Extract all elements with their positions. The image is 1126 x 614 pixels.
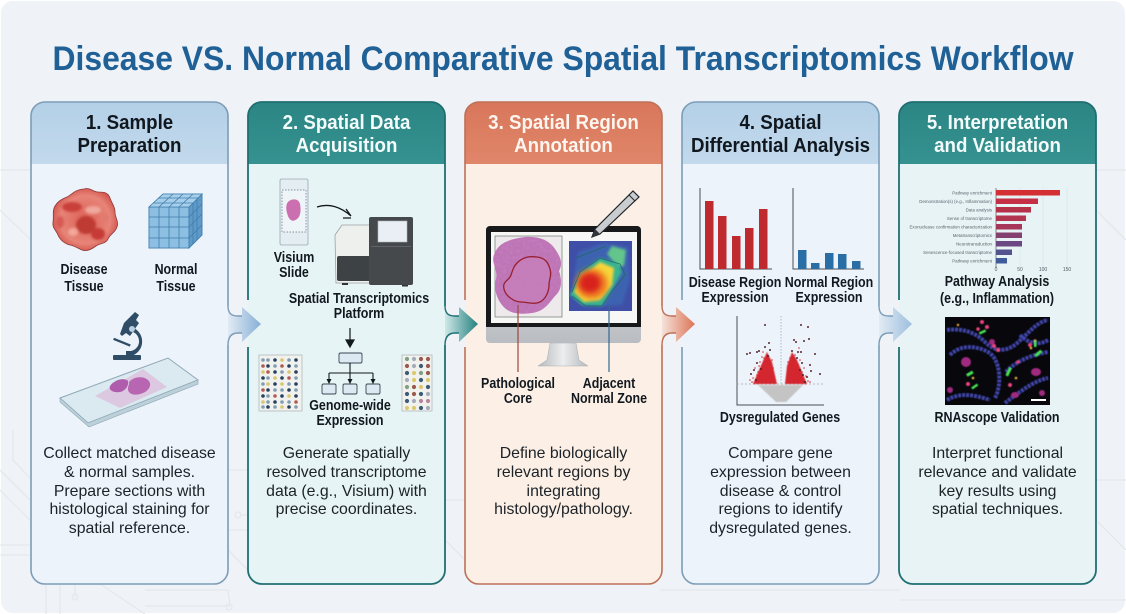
icon: annotation pencil: [592, 191, 639, 237]
panel 5 heading: and Validation: [934, 134, 1061, 157]
icon: tissue slide: [60, 358, 198, 427]
label: visium slide: Slide: [279, 264, 309, 280]
diagram: expression hierarchy: [322, 353, 380, 394]
chart: pathway analysis bars: 0: [995, 267, 998, 273]
panel 3 heading: 3. Spatial Region: [488, 111, 639, 134]
chart: pathway analysis bars: Pathway enrichment: [952, 258, 993, 264]
chart: pathway analysis bars: Pathway enrichment: [952, 190, 993, 196]
label: normal region expression: Expression: [795, 289, 863, 305]
panel 4 heading: Differential Analysis: [691, 134, 870, 157]
label: genome-wide expression: Expression: [316, 412, 384, 428]
panel 4 heading: 4. Spatial: [739, 111, 822, 134]
text: panel 1 description: spatial reference.: [69, 520, 190, 537]
icon: visium slide: [280, 179, 308, 245]
label: visium slide: Visium: [274, 249, 314, 265]
label: disease region expression: Disease Region: [689, 274, 781, 290]
label: disease region expression: Expression: [701, 289, 769, 305]
label: spatial transcriptomics platform: Platform: [334, 305, 384, 321]
text: panel 1 description: histological staining for: [49, 501, 210, 518]
chart: pathway analysis bars: Demonstration(s) (e.g., Inflammation): [919, 199, 993, 204]
label: dysregulated genes: Dysregulated Genes: [720, 409, 840, 425]
label: spatial transcriptomics platform: Spatial Transcriptomics: [289, 290, 429, 306]
text: panel 2 description: precise coordinates.: [276, 501, 417, 518]
chart: volcano plot: [737, 316, 824, 405]
text: panel 2 description: data (e.g., Visium) with: [266, 483, 427, 500]
text: panel 5 description: relevance and validate: [918, 464, 1077, 481]
label: pathway analysis: Pathway Analysis: [945, 273, 1050, 289]
label: normal region expression: Normal Region: [785, 274, 873, 290]
image: RNAscope micrograph: [945, 317, 1050, 405]
panel 1 heading: Preparation: [78, 134, 181, 157]
label: disease tissue: Tissue: [64, 278, 104, 294]
panel 2 heading: 2. Spatial Data: [283, 111, 411, 134]
text: panel 5 description: key results using: [939, 483, 1056, 500]
chart: pathway analysis bars: Neurotransduction: [956, 242, 993, 246]
icon: monitor with histology and heat map: [486, 226, 641, 372]
icon: right expression grid: [402, 355, 432, 411]
text: panel 3 description: histology/pathology.: [494, 501, 633, 518]
chart: normal region bars: [793, 188, 864, 269]
panel 1 heading: 1. Sample: [86, 111, 173, 134]
chart: pathway analysis bars: Data analysis: [966, 208, 993, 212]
label: pathway analysis: (e.g., Inflammation): [940, 290, 1054, 306]
label: adjacent normal zone: Normal Zone: [571, 390, 647, 406]
arrow: step 3 to 4: [662, 306, 695, 345]
chart: pathway analysis bars: 100: [1039, 267, 1047, 273]
chart: pathway analysis bars: 150: [1063, 267, 1071, 273]
chart: pathway analysis bars: Metatranscriptomics: [953, 233, 993, 238]
label: adjacent normal zone: Adjacent: [583, 375, 636, 391]
icon: normal tissue cube: [149, 194, 202, 248]
arrow: step 4 to 5: [879, 306, 912, 345]
arrow: step 2 to 3: [445, 306, 478, 345]
label: pathological core: Pathological: [481, 375, 555, 391]
text: panel 4 description: regions to identify: [718, 501, 843, 518]
arrow: slide to platform: [317, 205, 351, 218]
title: Disease VS. Normal Comparative Spatial Transcriptomics Workflow: [52, 40, 1074, 78]
arrow: step 1 to 2: [228, 306, 261, 345]
icon: left expression grid: [259, 355, 302, 411]
panel: 4 spatial differential analysis: [682, 102, 879, 584]
panel 3 heading: Annotation: [514, 134, 613, 157]
panel: 3 spatial region annotation: [465, 102, 662, 584]
chart: pathway analysis bars: Exonuclease confirmation characterization: [910, 224, 993, 230]
text: panel 4 description: expression between: [710, 464, 851, 481]
label: RNAscope validation: RNAscope Validation: [934, 409, 1060, 425]
text: panel 3 description: Define biologically: [500, 445, 627, 462]
text: panel 5 description: Interpret functional: [932, 445, 1063, 462]
label: genome-wide expression: Genome-wide: [309, 397, 391, 413]
text: panel 1 description: Collect matched disease: [43, 445, 216, 462]
panel: 2 spatial data acquisition: [248, 102, 445, 584]
chart: pathway analysis bars: [910, 188, 1071, 273]
arrow: platform to expression: [346, 328, 354, 347]
text: panel 2 description: Generate spatially: [283, 445, 410, 462]
panel: 1 sample preparation: [31, 102, 228, 584]
label: disease tissue: Disease: [60, 261, 108, 277]
text: panel 1 description: Prepare sections with: [54, 483, 205, 500]
chart: pathway analysis bars: Senescence-focused transcriptome: [923, 250, 993, 255]
text: panel 1 description: & normal samples.: [64, 464, 195, 481]
pointer: pathological core: [517, 305, 519, 372]
label: normal tissue: Normal: [155, 261, 197, 277]
pointer: adjacent normal zone: [608, 305, 610, 372]
background circuit pattern: [0, 170, 1126, 614]
text: panel 4 description: dysregulated genes.: [709, 520, 852, 537]
label: pathological core: Core: [504, 390, 532, 406]
text: panel 4 description: disease & control: [720, 483, 841, 500]
image: spatial heat map: [569, 241, 632, 311]
panel 5 heading: 5. Interpretation: [927, 111, 1068, 134]
text: panel 2 description: resolved transcriptome: [266, 464, 427, 481]
text: panel 5 description: spatial techniques.: [932, 501, 1063, 518]
text: panel 4 description: Compare gene: [728, 445, 833, 462]
chart: disease region bars: [700, 188, 772, 269]
panel 2 heading: Acquisition: [296, 134, 397, 157]
label: normal tissue: Tissue: [156, 278, 196, 294]
panel: 5 interpretation and validation: [899, 102, 1096, 584]
icon: disease tissue: [53, 189, 118, 251]
chart: pathway analysis bars: 50: [1017, 267, 1023, 273]
text: panel 3 description: integrating: [527, 483, 600, 500]
icon: sequencing platform: [335, 217, 413, 286]
icon: microscope: [113, 312, 142, 360]
image: H&E histology: [493, 236, 562, 317]
text: panel 3 description: relevant regions by: [497, 464, 630, 481]
chart: pathway analysis bars: Sense of transcriptome: [947, 216, 993, 221]
